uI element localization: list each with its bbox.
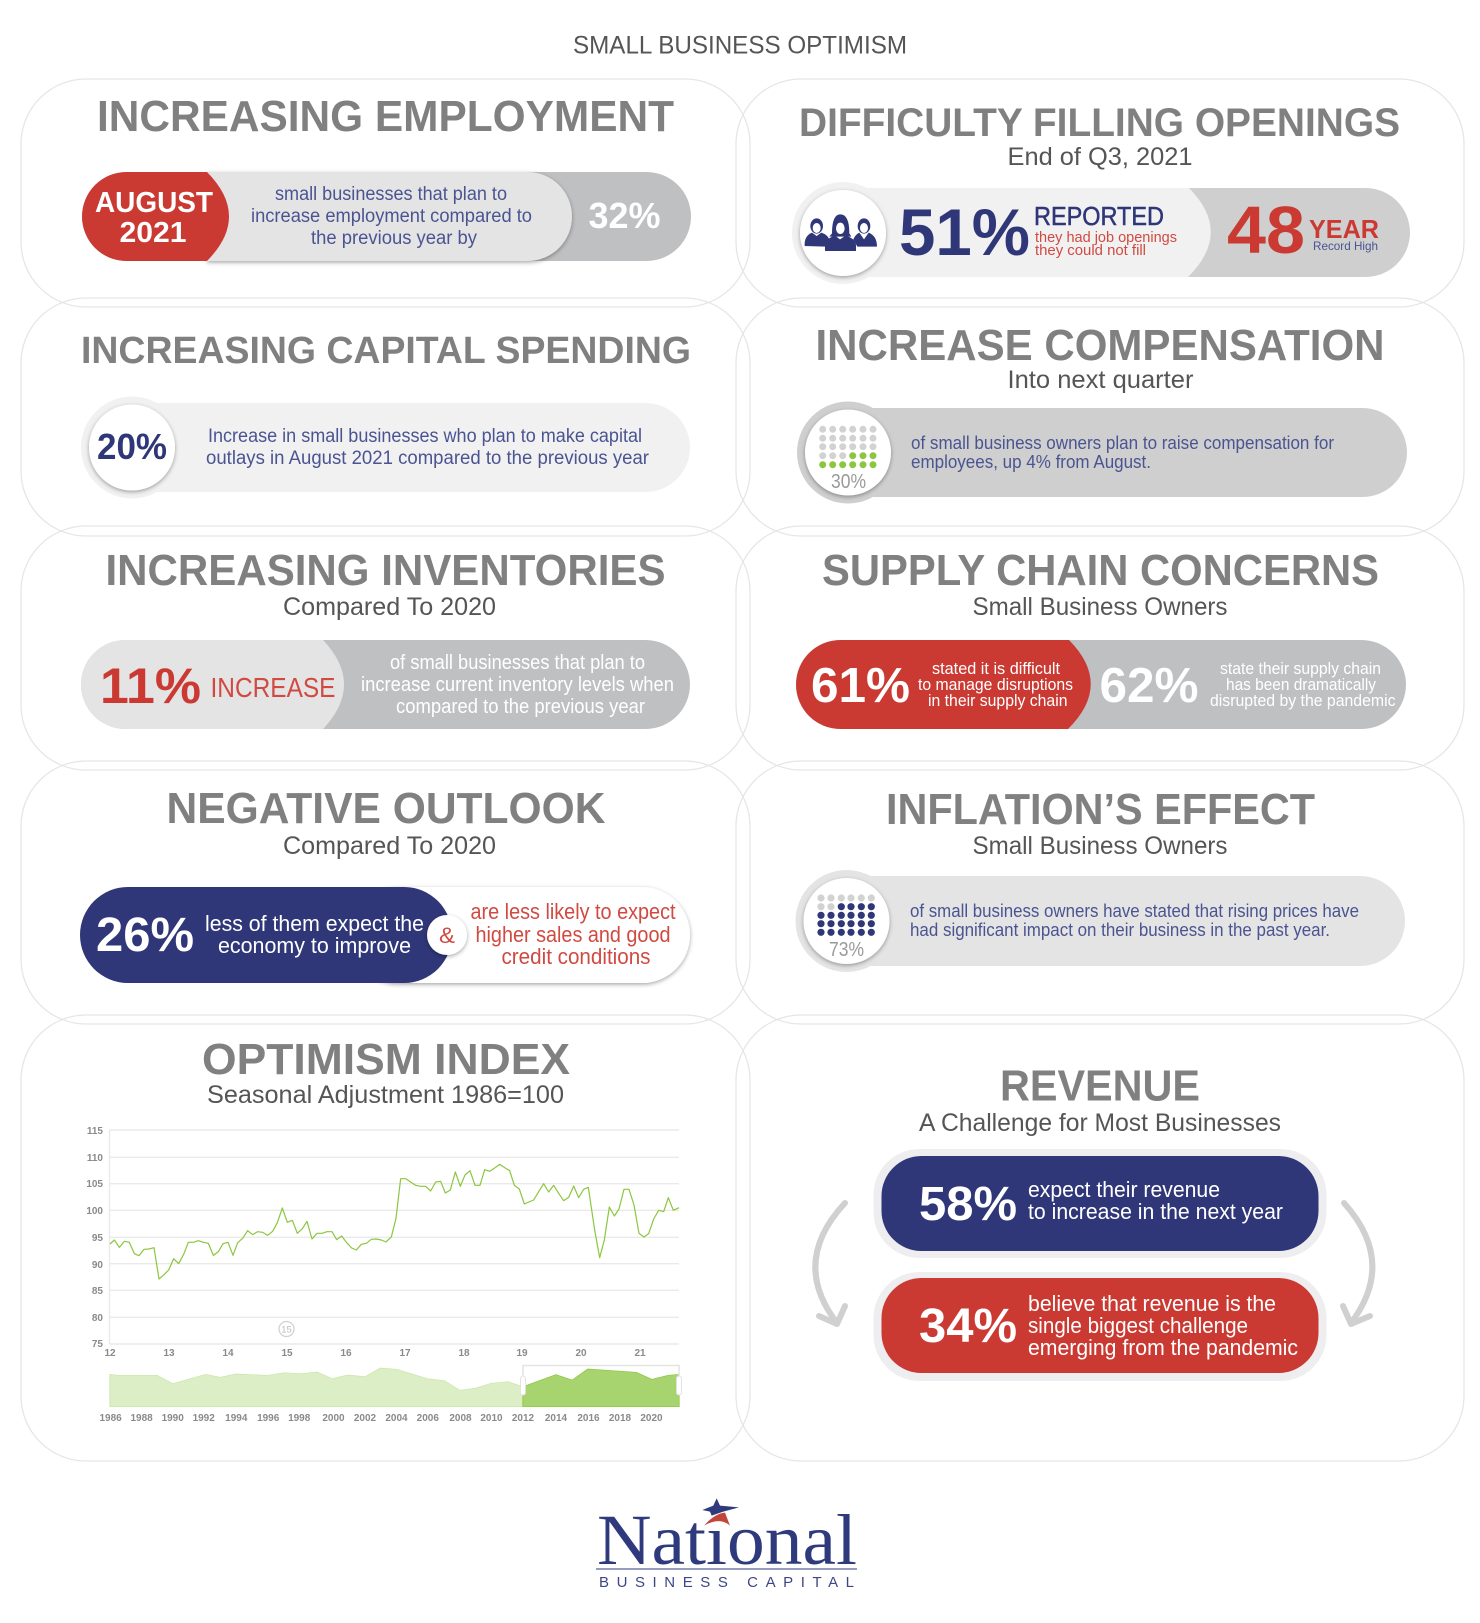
callout: 34 percent: believe that revenue is the [1028,1291,1276,1316]
panel: difficulty filling openings [736,79,1464,307]
heading: supply chain concerns: SUPPLY CHAIN CONCERNS [822,546,1379,595]
x axis labels: 20 [575,1348,587,1359]
logo: national business capital: National [597,1500,857,1580]
navigator year labels: 1990 [162,1413,184,1424]
x axis labels: 17 [399,1348,411,1359]
y axis labels: 90 [92,1260,103,1271]
marker: 15 [279,1322,294,1336]
icon: dot grid 30 percent [819,426,876,468]
y axis labels: 105 [86,1179,103,1190]
x axis labels: 12 [104,1348,116,1359]
bar: job openings stat [792,182,1410,284]
bar: compensation stat: employees, up 4% from August. [911,452,1151,472]
subheading: a challenge: A Challenge for Most Businesses [919,1109,1281,1137]
pill: inventory stat [81,640,690,729]
panel: revenue [736,1015,1464,1461]
heading: revenue: REVENUE [1000,1062,1200,1110]
heading: negative outlook: NEGATIVE OUTLOOK [166,784,606,833]
panel: optimism index [21,1015,750,1461]
pill: negative outlook stats [80,887,690,983]
subheading: compared to 2020: Compared To 2020 [283,832,496,860]
icon: dot grid 73 percent [817,894,875,936]
navigator year labels: 2012 [512,1413,535,1424]
bar: job openings stat: Record High [1313,239,1378,253]
pill: negative outlook stats: higher sales and good [476,922,670,947]
panel: increase compensation [736,298,1464,536]
x axis labels: 19 [516,1348,528,1359]
bar: inflation stat [796,870,1405,972]
heading: difficulty filling openings: DIFFICULTY FILLING OPENINGS [799,101,1400,145]
marker: 15: 15 [281,1324,292,1336]
pill: supply chain stats: to manage disruptions [918,676,1073,694]
heading: inflation's effect: INFLATION’S EFFECT [886,785,1315,834]
pill: august 2021 employment stat: increase employment compared to [251,206,532,227]
navigator year labels: 1992 [193,1413,215,1424]
bar: capital outlay stat: outlays in August 2021 compared to the previous year [206,448,650,469]
navigator year labels: 2002 [354,1413,377,1424]
bar: capital outlay stat [81,396,690,498]
pill: supply chain stats: has been dramatically [1226,676,1377,694]
x axis labels: 21 [634,1348,646,1359]
y axis labels: 85 [92,1286,103,1297]
pill: negative outlook stats: less of them expect the [205,911,424,936]
subheading: seasonal adjustment: Seasonal Adjustment 1986=100 [207,1081,564,1109]
pill: august 2021 employment stat: 2021 [120,217,186,249]
subheading: end of q3: End of Q3, 2021 [1008,143,1192,171]
pill: negative outlook stats: economy to improve [218,933,411,958]
navigator year labels: 2016 [577,1413,600,1424]
y axis labels: 75 [92,1339,103,1350]
x axis labels: 18 [458,1348,470,1359]
pill: supply chain stats: in their supply chain [928,692,1068,710]
panel: increasing inventories [21,526,750,770]
bar: inflation stat: of small business owners have stated that rising prices have [910,901,1359,921]
navigator year labels: 2004 [385,1413,408,1424]
navigator year labels [99,1413,663,1424]
callout: 34 percent [874,1272,1326,1381]
pill: negative outlook stats: are less likely to expect [470,899,676,924]
pill: supply chain stats: stated it is difficult [932,660,1060,678]
title: SMALL BUSINESS OPTIMISM [573,32,907,60]
navigator year labels: 2008 [449,1413,472,1424]
pill: supply chain stats [796,640,1406,729]
bar: job openings stat: 48 [1227,193,1305,268]
heading: increase compensation: INCREASE COMPENSATION [816,321,1384,370]
pill: negative outlook stats: 26% [96,909,194,962]
data line [110,1164,679,1279]
navigator year labels: 1996 [257,1413,280,1424]
pill: august 2021 employment stat: small businesses that plan to [275,184,507,205]
panel: supply chain concerns [736,526,1464,770]
x axis labels: 16 [340,1348,352,1359]
navigator year labels: 2014 [545,1413,568,1424]
panel: negative outlook [21,761,750,1024]
heading: increasing inventories: INCREASING INVENTORIES [106,546,666,595]
y axis labels: 80 [92,1313,103,1324]
bar: inflation stat: 73% [829,939,864,961]
pill: august 2021 employment stat: AUGUST [95,187,213,219]
heading: increasing employment: INCREASING EMPLOYMENT [97,92,674,141]
x axis labels: 13 [163,1348,175,1359]
pill: supply chain stats: 62% [1100,659,1198,713]
y axis labels: 100 [86,1206,103,1217]
icon: star [702,1498,739,1526]
pill: inventory stat: 11% [100,658,201,714]
navigator year labels: 1986 [99,1413,122,1424]
subheading: compared to 2020: Compared To 2020 [283,593,496,621]
x axis labels: 15 [281,1348,293,1359]
subheading: small business owners: Small Business Owners [972,832,1228,860]
pill: inventory stat: of small businesses that plan to [390,652,645,674]
bar: capital outlay stat: 20% [97,426,167,467]
arrow: right [1343,1203,1372,1324]
navigator year labels: 2006 [417,1413,439,1424]
panel: increasing capital spending [21,298,750,536]
navigator chart [99,1366,682,1424]
panel: inflation's effect [736,761,1464,1024]
panel: increasing employment [21,79,750,307]
callout: 58 percent [874,1149,1326,1258]
arrow: left [815,1203,845,1324]
bar: compensation stat [797,402,1407,504]
bar: compensation stat: 30% [831,471,866,493]
bar: job openings stat: 51% [899,195,1030,269]
navigator year labels: 1994 [225,1413,248,1424]
y axis labels: 110 [87,1153,103,1164]
pill: supply chain stats: state their supply chain [1220,660,1381,678]
icon: ampersand circle: & [439,923,455,948]
y axis labels: 95 [92,1233,103,1244]
pill: august 2021 employment stat: 32% [588,195,660,236]
pill: negative outlook stats: credit conditions [502,944,650,969]
pill: supply chain stats: 61% [811,659,910,713]
line chart: optimism index [86,1126,679,1359]
icon: three people [805,214,877,251]
subheading: small business owners: Small Business Owners [972,593,1228,621]
icon: ampersand circle [427,915,467,955]
bar: job openings stat: they had job openings [1035,229,1177,246]
callout: 58 percent: 58% [919,1178,1017,1231]
bar: job openings stat: they could not fill [1035,242,1146,259]
pill: inventory stat: INCREASE [210,672,336,703]
heading: increasing capital spending: INCREASING CAPITAL SPENDING [81,330,691,372]
bar: capital outlay stat: Increase in small businesses who plan to make capital [208,426,642,447]
callout: 58 percent: expect their revenue [1028,1177,1220,1202]
bar: job openings stat: YEAR [1309,214,1379,244]
callout: 34 percent: 34% [919,1300,1017,1353]
y axis labels [86,1126,103,1350]
callout: 58 percent: to increase in the next year [1028,1199,1283,1224]
navigator year labels: 1988 [130,1413,153,1424]
bar: compensation stat: of small business owners plan to raise compensation for [911,433,1334,453]
navigator year labels: 1998 [288,1413,311,1424]
navigator year labels: 2000 [322,1413,345,1424]
pill: inventory stat: increase current inventory levels when [361,674,674,696]
logo: national business capital: BUSINESS CAPITAL [599,1574,854,1591]
callout: 34 percent: emerging from the pandemic [1028,1335,1298,1360]
x axis labels [104,1348,646,1359]
pill: august 2021 employment stat [82,172,691,261]
pill: supply chain stats: disrupted by the pandemic [1210,692,1396,710]
subheading: into next quarter: Into next quarter [1008,366,1194,394]
callout: 34 percent: single biggest challenge [1028,1313,1248,1338]
bar: job openings stat: REPORTED [1034,201,1164,231]
bar: inflation stat: had significant impact on their business in the past year. [910,920,1330,940]
heading: optimism index: OPTIMISM INDEX [202,1035,570,1084]
y axis labels: 115 [87,1126,103,1137]
navigator year labels: 2010 [480,1413,503,1424]
x axis labels: 14 [222,1348,234,1359]
pill: inventory stat: compared to the previous year [396,696,645,718]
navigator year labels: 2018 [609,1413,632,1424]
pill: august 2021 employment stat: the previous year by [311,228,477,249]
navigator year labels: 2020 [640,1413,663,1424]
